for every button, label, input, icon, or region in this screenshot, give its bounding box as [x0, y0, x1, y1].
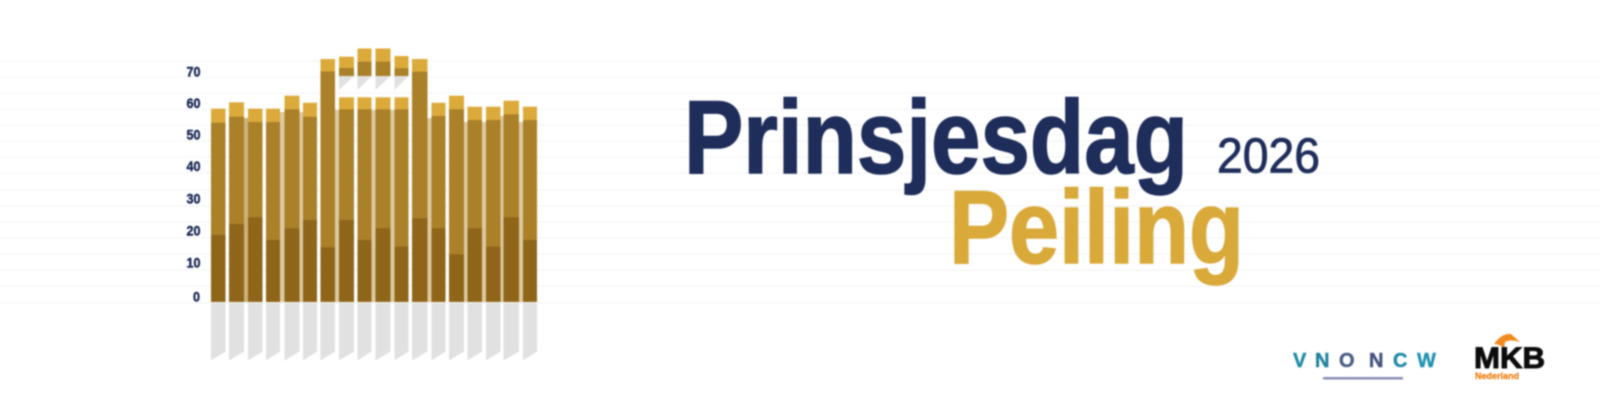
bars: middle segments [211, 62, 537, 255]
logo: MKB Nederland: MKB [1474, 342, 1545, 375]
icon: orange swoosh [1494, 334, 1520, 348]
logo: MKB Nederland: Nederland [1475, 371, 1519, 382]
y-axis labels: 50 [186, 126, 201, 142]
logo: VNO NCW: C [1393, 350, 1407, 372]
bar reflections [211, 76, 537, 360]
bars: total values, gold caps [211, 48, 537, 124]
bars: dark base segments [211, 217, 537, 302]
chart: briefcase-shaped stacked bar chart [186, 48, 537, 360]
logo: MKB Nederland [1474, 334, 1545, 382]
pale gaps between bars [244, 110, 523, 302]
y-axis labels: 40 [186, 158, 201, 174]
y-axis labels [186, 64, 201, 304]
y-axis labels: 70 [186, 64, 201, 80]
subtitle: Peiling: Peiling [949, 170, 1244, 286]
year: 2026: 2026 [1217, 130, 1320, 184]
y-axis labels: 60 [186, 95, 201, 111]
title: Prinsjesdag: Prinsjesdag [684, 80, 1188, 196]
y-axis labels: 30 [186, 190, 201, 206]
logo: VNO NCW: N [1315, 350, 1329, 372]
logo: VNO NCW [1293, 350, 1436, 380]
logo: VNO NCW: N [1369, 350, 1383, 372]
logo: VNO NCW: V [1293, 350, 1307, 372]
logo: VNO NCW: O [1339, 350, 1355, 372]
y-axis labels: 20 [186, 222, 201, 238]
y-axis labels: 10 [186, 254, 201, 270]
logo: VNO NCW: W [1417, 350, 1436, 372]
y-axis labels: 0 [193, 288, 200, 304]
